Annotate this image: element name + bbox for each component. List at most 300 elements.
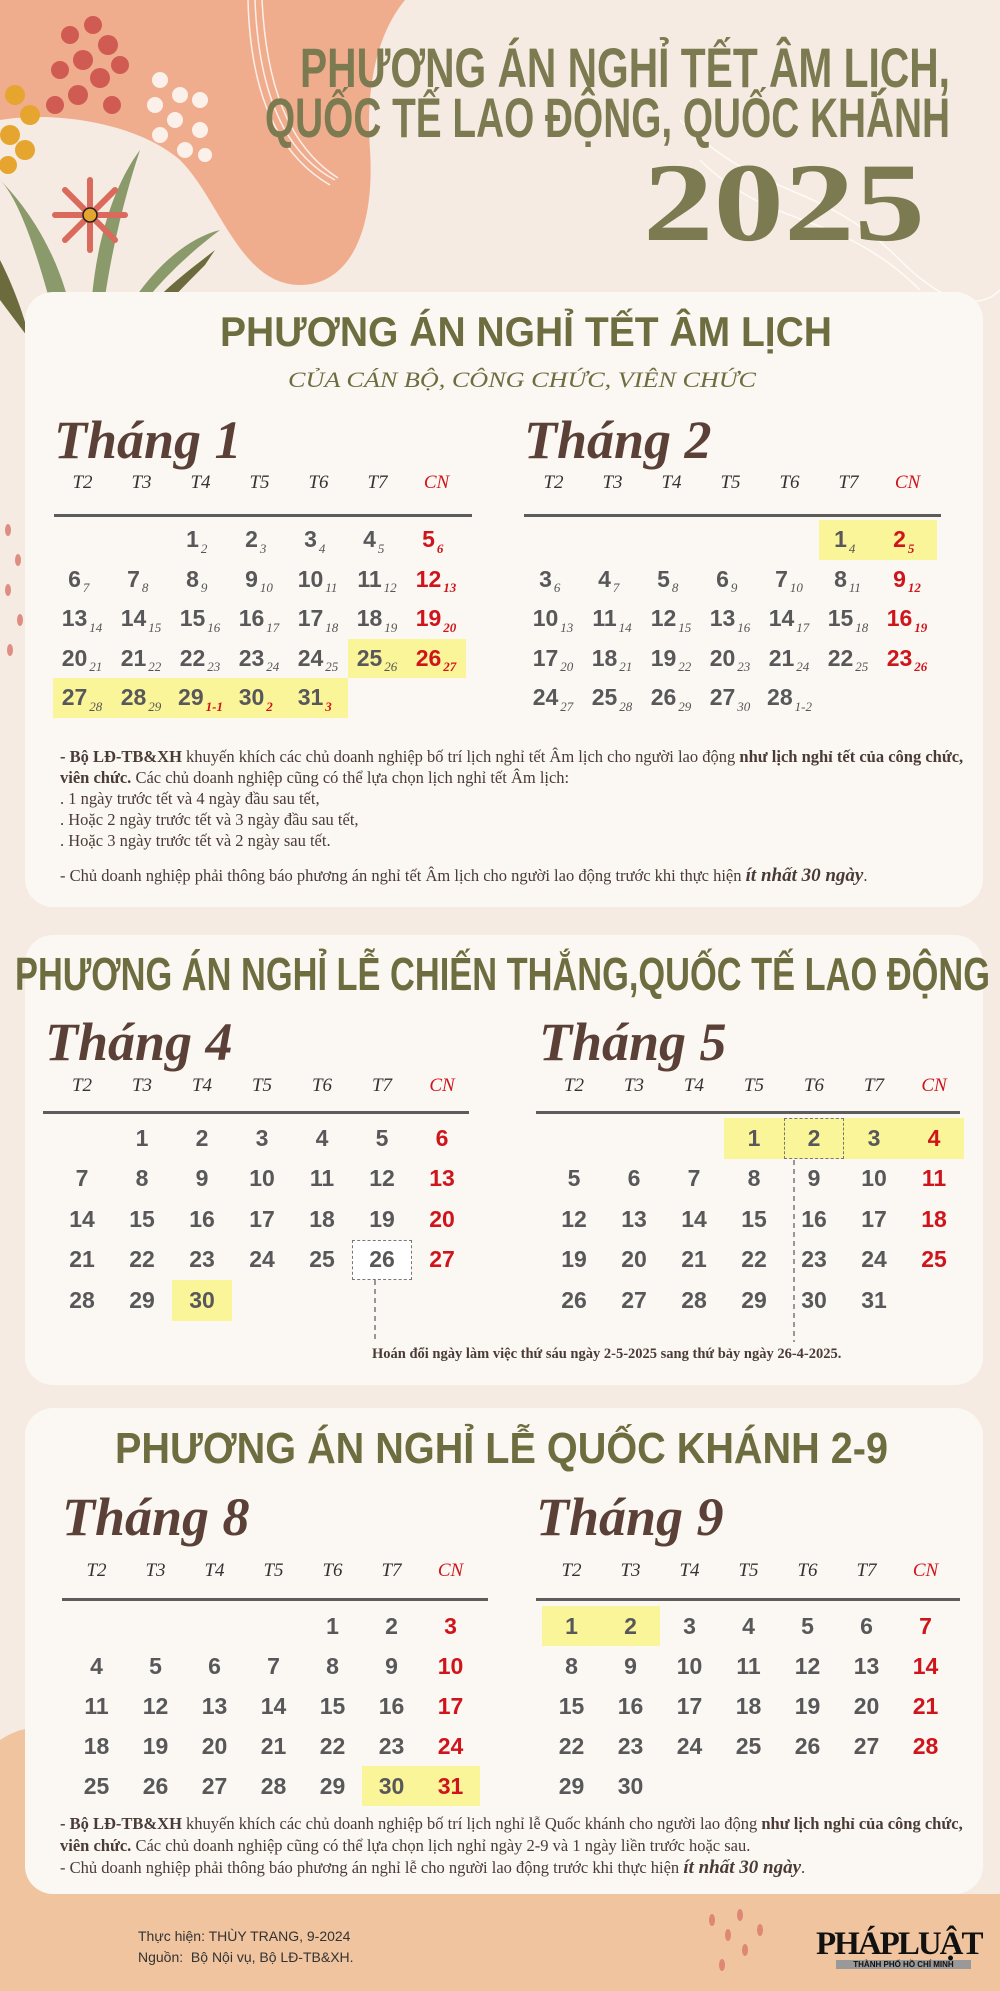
calendar: january: 14 [121,605,146,631]
calendar: september: 26 [795,1732,820,1758]
weekdays apr: T6 [312,1075,332,1096]
weekdays jan: CN [424,472,449,493]
calendar: may: 20 [621,1246,647,1272]
calendar: august: 5 [149,1652,162,1678]
calendar: january: 24 [298,645,323,671]
calendar: january: 1-1 [206,698,223,714]
calendar: january: 10 [298,566,323,592]
calendar: august: 10 [438,1652,463,1678]
calendar: january: 18 [325,620,338,634]
calendar: april: 28 [69,1287,95,1313]
weekdays apr [72,1075,456,1096]
calendar: may: 5 [568,1165,580,1191]
calendar: september: 6 [860,1612,873,1638]
calendar: may: 4 [928,1125,940,1151]
arrows: dashed connectors [374,1160,795,1342]
calendar: february: 19 [914,620,927,634]
calendar: april: 22 [129,1246,155,1272]
calendar: january: 28 [121,684,146,710]
calendar: august: 17 [438,1692,463,1718]
calendar: april: 27 [429,1246,455,1272]
calendar: august: 3 [444,1612,457,1638]
calendar: april: 20 [429,1206,455,1232]
weekdays may [564,1075,948,1096]
calendar: february: 8 [672,580,678,595]
calendar: august: 8 [326,1652,339,1678]
calendar: may: 24 [861,1246,887,1272]
calendar: january: 25 [357,645,382,671]
notes: tet: . 1 ngày trước tết và 4 ngày đầu sau tết, [60,789,320,808]
calendar: august: 7 [267,1652,280,1678]
weekdays feb [543,472,921,493]
calendar: february: 21 [619,659,632,674]
calendar: february: 6 [554,580,560,595]
weekdays sep: T6 [797,1560,818,1581]
calendar: september: 22 [559,1732,584,1758]
weekdays jan: T4 [190,472,211,493]
calendar: may: 3 [868,1125,880,1151]
calendar: february: 26 [914,659,927,674]
calendar: january: 28 [89,698,102,714]
weekdays jan [72,472,450,493]
calendar: january: 4 [363,526,376,552]
calendar: may: 17 [861,1206,887,1232]
calendar: may: 31 [861,1287,887,1313]
calendar: january: 29 [178,684,204,710]
weekdays feb: T3 [602,472,623,493]
calendar: september: 15 [559,1692,584,1718]
calendar: august: 2 [385,1612,398,1638]
calendar: april: 1 [136,1125,148,1151]
calendar: january: 19 [416,605,441,631]
calendar: september: 25 [736,1732,761,1758]
calendar: april: 9 [196,1165,208,1191]
calendar: may: 1 [748,1125,760,1151]
calendar: august: 12 [143,1692,168,1718]
weekdays aug: T7 [381,1560,402,1581]
calendar: january: 27 [62,684,87,710]
calendar: august: 6 [208,1652,221,1678]
calendar: august: 23 [379,1732,404,1758]
weekdays aug: T6 [322,1560,343,1581]
weekdays may: T5 [744,1075,764,1096]
weekdays aug: T2 [86,1560,107,1581]
calendar: may: 13 [621,1206,647,1232]
calendar: may: 7 [688,1165,700,1191]
calendar: may: 28 [681,1287,707,1313]
weekdays may: CN [921,1075,947,1096]
calendar: april: 12 [369,1165,395,1191]
calendar: may: 30 [801,1287,827,1313]
calendar: february: 12 [908,580,921,595]
calendar: may: 19 [561,1246,587,1272]
calendar: august: 1 [326,1612,339,1638]
calendar: january: 15 [180,605,205,631]
calendar: february: 15 [828,605,853,631]
calendar: february: 10 [533,605,558,631]
calendar: january: 24 [266,659,279,674]
calendar: august: 29 [320,1772,345,1798]
calendar: august: 20 [202,1732,227,1758]
calendar: august: 11 [84,1692,109,1718]
calendar: february: 15 [678,620,691,634]
calendar: february: 27 [560,698,573,714]
calendar: september: 30 [618,1772,643,1798]
calendar: february: 2 [893,526,906,552]
calendar: february: 9 [731,580,737,595]
calendar: april: 15 [129,1206,155,1232]
calendar: may: 6 [628,1165,640,1191]
calendar: february: 3 [539,566,552,592]
calendar: february: 24 [796,659,809,674]
calendar: february: 14 [769,605,794,631]
calendar: january: 20 [62,645,87,671]
calendar: september: 29 [559,1772,584,1798]
calendar: august: 22 [320,1732,345,1758]
heading: tet: PHƯƠNG ÁN NGHỈ TẾT ÂM LỊCH [220,307,832,355]
calendar: september: 17 [677,1692,702,1718]
calendar: august: 16 [379,1692,404,1718]
calendar: april: 24 [249,1246,275,1272]
calendar: april: 7 [76,1165,88,1191]
calendar: january: 7 [127,566,140,592]
month title: Tháng 5: Tháng 5 [539,1012,727,1072]
heading: tet [220,307,832,392]
calendar: february: 23 [887,645,912,671]
calendar: september: 7 [919,1612,932,1638]
calendar: january: 31 [298,684,323,710]
calendar: september: 9 [624,1652,637,1678]
calendar: may: 23 [801,1246,827,1272]
calendar: august: 25 [84,1772,109,1798]
weekdays feb: T2 [543,472,564,493]
calendar: january: 30 [239,684,264,710]
weekdays sep: T5 [738,1560,759,1581]
calendar: april: 10 [249,1165,275,1191]
calendar: january: 16 [239,605,264,631]
calendar: september: 4 [742,1612,755,1638]
weekdays aug: CN [438,1560,463,1581]
calendar: august: 24 [438,1732,463,1758]
panel: national day [25,1408,983,1894]
calendar: february [533,520,937,714]
calendar: april: 11 [310,1165,334,1191]
calendar: may: 22 [741,1246,767,1272]
calendar: february: 29 [678,698,691,714]
calendar: january: 14 [89,620,102,634]
calendar: august: 19 [143,1732,168,1758]
calendar: april: 19 [369,1206,395,1232]
calendar: january: 6 [68,566,81,592]
calendar: august: 30 [379,1772,404,1798]
calendar: september: 12 [795,1652,820,1678]
month title: Tháng 4: Tháng 4 [45,1012,233,1072]
weekdays sep: CN [913,1560,938,1581]
calendar: april: 14 [69,1206,95,1232]
calendar: february: 16 [887,605,912,631]
calendar: january: 21 [89,659,102,674]
calendar: february: 1 [834,526,847,552]
calendar: april: 16 [189,1206,215,1232]
calendar: may: 21 [681,1246,707,1272]
footer credits: Thực hiện: THÙY TRANG, 9-2024 [138,1928,350,1944]
calendar: april: 8 [136,1165,148,1191]
notes: national day: - Chủ doanh nghiệp phải thông báo phương án nghỉ lễ cho người lao động trước khi thực hiện ít nhất 30 ngày. [60,1857,805,1878]
calendar: february: 22 [828,645,853,671]
calendar: january: 13 [443,580,456,595]
calendar: september: 28 [913,1732,938,1758]
calendar: may: 25 [921,1246,947,1272]
weekdays aug: T5 [263,1560,284,1581]
logo: Pháp Luật: PHÁPLUẬT [816,1926,982,1962]
weekdays sep: T4 [679,1560,700,1581]
calendar: august: 28 [261,1772,286,1798]
calendar: september: 19 [795,1692,820,1718]
calendar: september: 2 [624,1612,637,1638]
calendar: august: 31 [438,1772,463,1798]
calendar: january: 13 [62,605,87,631]
calendar: february: 16 [737,620,750,634]
main title [265,36,950,260]
calendar: january: 9 [245,566,258,592]
calendar: september: 21 [913,1692,938,1718]
heading: tet: CỦA CÁN BỘ, CÔNG CHỨC, VIÊN CHỨC [288,367,756,392]
calendar: september: 5 [801,1612,814,1638]
month title: Tháng 8: Tháng 8 [62,1487,250,1547]
calendar: february: 4 [849,540,855,556]
weekdays feb: T6 [779,472,800,493]
calendar: february: 18 [592,645,617,671]
calendar: february: 28 [619,698,632,714]
calendar: february: 18 [855,620,868,634]
calendar: may: 27 [621,1287,647,1313]
calendar: january: 8 [186,566,199,592]
weekdays jan: T5 [249,472,270,493]
calendar: february: 8 [834,566,847,592]
weekdays apr: CN [429,1075,455,1096]
weekdays jan: T6 [308,472,329,493]
calendar: february: 13 [560,620,573,634]
calendar: september: 23 [618,1732,643,1758]
calendar: january: 20 [443,620,456,634]
calendar: january: 11 [357,566,382,592]
calendar: september: 13 [854,1652,879,1678]
calendar: february: 19 [651,645,676,671]
calendar: february: 12 [651,605,676,631]
calendar: september: 20 [854,1692,879,1718]
weekdays jan: T7 [367,472,388,493]
calendar: february: 11 [849,580,861,595]
calendar: february: 24 [533,684,558,710]
weekdays may: T4 [684,1075,704,1096]
calendar: february: 23 [737,659,750,674]
calendar: february: 6 [716,566,729,592]
calendar: january: 10 [260,580,273,595]
weekdays sep: T3 [620,1560,641,1581]
weekdays may: T6 [804,1075,824,1096]
calendar: april: 18 [309,1206,335,1232]
calendar: august: 18 [84,1732,109,1758]
calendar: january: 4 [319,540,325,556]
calendar: august: 13 [202,1692,227,1718]
calendar: february: 21 [769,645,794,671]
month title: Tháng 1: Tháng 1 [54,410,242,470]
weekdays feb: T4 [661,472,682,493]
calendar: february: 5 [908,540,914,556]
calendar: april: 2 [196,1125,208,1151]
calendar: february: 13 [710,605,735,631]
calendar: september: 16 [618,1692,643,1718]
calendar: february: 4 [598,566,611,592]
calendar: september: 27 [854,1732,879,1758]
calendar: september: 8 [565,1652,578,1678]
calendar: august: 15 [320,1692,345,1718]
calendar: january [53,526,466,718]
notes: national day: - Bộ LĐ-TB&XH khuyến khích các chủ doanh nghiệp bố trí lịch nghỉ lễ Quốc khánh cho người lao động như lịch nghỉ của công chức, viên chức. Các chủ doanh nghiệp cũng có thể lựa chọn lịch nghỉ ngày 2-9 và 1 ngày liền trước hoặc sau. [60,1814,963,1855]
month title: Tháng 2: Tháng 2 [524,410,712,470]
calendar: january: 23 [239,645,264,671]
calendar: january: 3 [260,540,266,556]
calendar: january: 17 [266,620,279,634]
calendar: february: 25 [855,659,868,674]
calendar: may: 16 [801,1206,827,1232]
calendar: january: 17 [298,605,323,631]
calendar: january: 8 [142,580,148,595]
calendar: january: 2 [201,540,207,556]
weekdays apr: T7 [372,1075,392,1096]
calendar: august: 21 [261,1732,286,1758]
weekdays jan: T3 [131,472,152,493]
calendar: april: 17 [249,1206,275,1232]
calendar: february: 27 [710,684,735,710]
calendar: august [84,1612,480,1806]
weekdays jan: T2 [72,472,93,493]
calendar: january: 12 [384,580,397,595]
calendar: august: 26 [143,1772,168,1798]
calendar: april: 26 [369,1246,395,1272]
weekdays apr: T5 [252,1075,272,1096]
weekdays may: T3 [624,1075,644,1096]
calendar: january: 27 [443,659,456,674]
calendar: april: 5 [376,1125,388,1151]
calendar: february: 20 [710,645,735,671]
calendar: february: 22 [678,659,691,674]
calendar: january: 21 [121,645,146,671]
calendar: september: 3 [683,1612,696,1638]
calendar: may: 26 [561,1287,587,1313]
calendar: april: 23 [189,1246,215,1272]
calendar: april: 30 [189,1287,215,1313]
calendar: february: 11 [592,605,617,631]
calendar: january: 1 [186,526,199,552]
footer credits: Nguồn: Bộ Nội vụ, Bộ LĐ-TB&XH. [138,1949,354,1965]
calendar: january: 5 [378,540,384,556]
panel: tet [25,292,983,907]
calendar: february: 7 [775,566,788,592]
calendar: september [542,1606,938,1798]
notes: tet [60,747,963,886]
note: swap day: Hoán đổi ngày làm việc thứ sáu ngày 2-5-2025 sang thứ bảy ngày 26-4-2025. [372,1346,841,1362]
calendar: january: 16 [207,620,220,634]
weekdays aug: T3 [145,1560,166,1581]
calendar: april: 25 [309,1246,335,1272]
calendar: january: 19 [384,620,397,634]
calendar: february: 9 [893,566,906,592]
calendar: february: 17 [533,645,558,671]
calendar: may: 14 [681,1206,707,1232]
calendar: january: 26 [416,645,441,671]
notes: tet: - Chủ doanh nghiệp phải thông báo phương án nghỉ tết Âm lịch cho người lao động trước khi thực hiện ít nhất 30 ngày. [60,865,868,886]
calendar: january: 18 [357,605,382,631]
calendar: february: 30 [737,698,750,714]
calendar: january: 6 [437,540,443,556]
notes: national day [60,1814,963,1878]
calendar: august: 4 [90,1652,103,1678]
calendar: may: 12 [561,1206,587,1232]
calendar: september: 14 [913,1652,938,1678]
calendar: february: 5 [657,566,670,592]
calendar: may [561,1118,964,1313]
calendar: february: 1-2 [795,698,812,714]
calendar: september: 18 [736,1692,761,1718]
calendar: january: 7 [83,580,89,595]
calendar: april: 13 [429,1165,455,1191]
calendar: january: 25 [325,659,338,674]
calendar: january: 29 [148,698,161,714]
calendar: february: 7 [613,580,619,595]
calendar: january: 9 [201,580,207,595]
calendar: april: 3 [256,1125,268,1151]
weekdays apr: T4 [192,1075,212,1096]
calendar: may: 10 [861,1165,887,1191]
calendar: september: 11 [736,1652,761,1678]
calendar: april: 4 [316,1125,328,1151]
calendar: january: 3 [325,698,332,714]
calendar: january: 3 [304,526,317,552]
calendar: may: 15 [741,1206,767,1232]
calendar: may: 9 [808,1165,820,1191]
weekdays may: T2 [564,1075,584,1096]
calendar: august: 9 [385,1652,398,1678]
notes: tet: - Bộ LĐ-TB&XH khuyến khích các chủ doanh nghiệp bố trí lịch nghỉ tết Âm lịch cho người lao động như lịch nghỉ tết của công chức, viên chức. Các chủ doanh nghiệp cũng có thể lựa chọn lịch nghỉ tết Âm lịch: [60,747,963,787]
calendar: february: 25 [592,684,617,710]
weekdays aug: T4 [204,1560,225,1581]
calendar: january: 15 [148,620,161,634]
calendar: january: 22 [180,645,205,671]
calendar: april: 29 [129,1287,155,1313]
calendar: january: 11 [325,580,337,595]
calendar: april: 6 [436,1125,448,1151]
calendar: august: 14 [261,1692,286,1718]
calendar: january: 5 [422,526,435,552]
weekdays sep: T7 [856,1560,877,1581]
calendar: february: 10 [790,580,803,595]
calendar: september: 1 [565,1612,578,1638]
calendar: february: 17 [796,620,809,634]
calendar: january: 2 [266,698,273,714]
weekdays feb: CN [895,472,920,493]
calendar: may: 2 [808,1125,820,1151]
calendar: september: 10 [677,1652,702,1678]
calendar: may: 11 [922,1165,946,1191]
calendar: january: 23 [207,659,220,674]
month title: Tháng 9: Tháng 9 [536,1487,724,1547]
calendar: february: 20 [560,659,573,674]
calendar: january: 2 [245,526,258,552]
weekdays aug [86,1560,464,1581]
calendar: may: 18 [921,1206,947,1232]
heading: national day: PHƯƠNG ÁN NGHỈ LỄ QUỐC KHÁNH 2-9 [115,1422,888,1473]
